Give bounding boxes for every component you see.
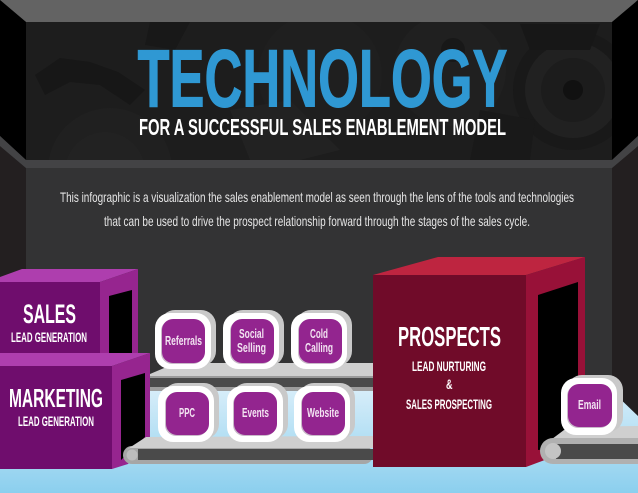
tile: social selling: Social bbox=[239, 327, 264, 341]
left side wall bbox=[0, 146, 26, 420]
tile: cold calling: Calling bbox=[305, 341, 333, 355]
right side wall bbox=[612, 146, 638, 416]
tile: website bbox=[294, 383, 355, 442]
banner bbox=[26, 22, 612, 160]
tile: events: Events bbox=[242, 406, 269, 420]
box: marketing bbox=[0, 353, 150, 469]
tile: referrals bbox=[155, 310, 216, 369]
right upper wall bbox=[612, 0, 638, 160]
conveyor: right bbox=[540, 426, 638, 464]
gears bbox=[563, 80, 583, 100]
box: sales: LEAD GENERATION bbox=[11, 329, 87, 345]
tile: social selling bbox=[223, 310, 284, 369]
tile: social selling: Selling bbox=[237, 341, 266, 355]
lip under banner bbox=[0, 136, 638, 168]
box: prospects: PROSPECTS bbox=[398, 321, 501, 352]
left upper wall bbox=[0, 0, 26, 160]
box: marketing: LEAD GENERATION bbox=[18, 413, 94, 429]
back wall bbox=[0, 160, 638, 400]
tile: cold calling bbox=[291, 310, 352, 369]
tile: referrals: Referrals bbox=[165, 334, 202, 348]
box: prospects: SALES PROSPECTING bbox=[406, 396, 492, 412]
box: sales bbox=[0, 269, 138, 353]
box: prospects bbox=[373, 257, 585, 467]
tile: ppc bbox=[158, 383, 219, 442]
tile: website: Website bbox=[307, 406, 339, 420]
ceiling bbox=[0, 0, 638, 22]
tile: events bbox=[227, 383, 288, 442]
conveyor: upper bbox=[150, 363, 373, 391]
box: prospects: & bbox=[446, 376, 452, 392]
box: prospects: LEAD NURTURING bbox=[412, 358, 486, 374]
tile: email bbox=[561, 375, 623, 435]
intro text bbox=[60, 189, 574, 229]
tile: email: Email bbox=[578, 398, 601, 412]
box: marketing: MARKETING bbox=[9, 383, 103, 413]
conveyor: lower bbox=[123, 436, 373, 464]
tile: ppc: PPC bbox=[179, 406, 195, 420]
floor bbox=[0, 391, 638, 493]
tile: cold calling: Cold bbox=[310, 327, 328, 341]
box: sales: SALES bbox=[23, 299, 76, 329]
